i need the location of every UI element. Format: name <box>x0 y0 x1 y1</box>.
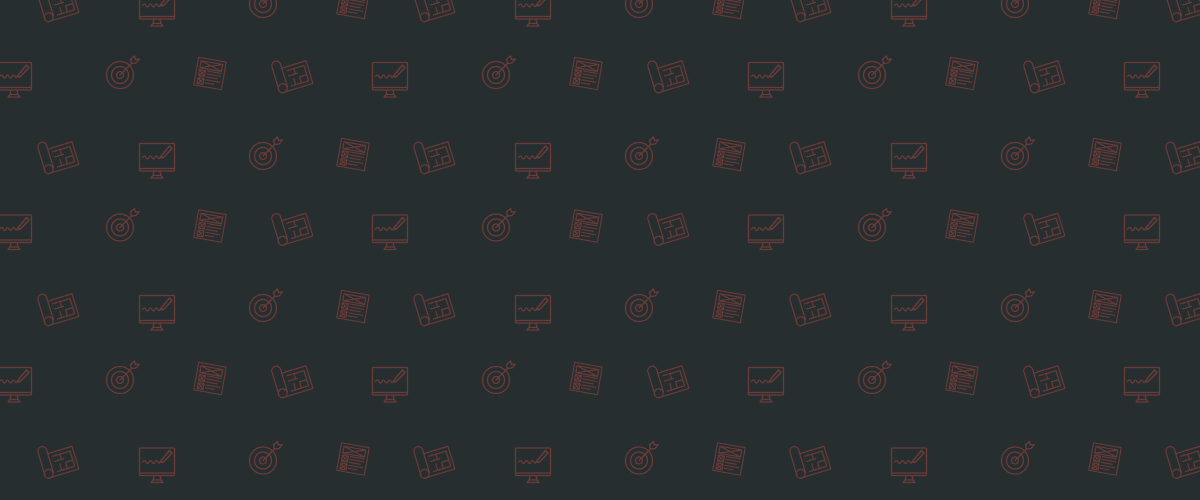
icon: document <box>194 210 226 242</box>
icon: monitor <box>516 144 550 178</box>
icon: monitor <box>1124 368 1160 402</box>
icon: target <box>1002 442 1034 474</box>
icon: monitor <box>0 215 32 250</box>
icon: document <box>337 0 369 19</box>
icon: blueprint <box>1022 53 1065 94</box>
icon: blueprint <box>788 0 831 23</box>
icon: monitor <box>372 62 408 97</box>
icon: target <box>1002 137 1034 170</box>
icon: blueprint <box>646 53 689 94</box>
icon: blueprint <box>36 438 79 479</box>
icon: target <box>250 137 282 170</box>
icon row 2 <box>0 53 1160 97</box>
icon: blueprint <box>412 0 455 23</box>
icon: document <box>570 57 602 90</box>
icon: target <box>106 361 140 394</box>
icon: monitor <box>748 368 784 402</box>
icon: document <box>946 362 978 395</box>
icon: monitor <box>140 0 174 26</box>
icon: document <box>570 362 602 395</box>
icon: blueprint <box>1164 286 1200 327</box>
icon: target <box>250 0 282 18</box>
icon: document <box>713 138 745 171</box>
icon: target <box>858 361 892 394</box>
icon: blueprint <box>412 286 455 327</box>
icon: blueprint <box>646 358 689 399</box>
icon row 5 <box>36 286 1200 330</box>
icon: blueprint <box>788 286 831 327</box>
icon: target <box>106 56 140 88</box>
icon: blueprint <box>646 205 689 246</box>
icon: document <box>337 443 369 475</box>
icon: document <box>194 362 226 395</box>
icon: target <box>250 442 282 474</box>
icon: monitor <box>892 448 926 482</box>
icon: monitor <box>372 215 408 250</box>
icon: document <box>713 0 745 19</box>
icon: target <box>858 56 892 88</box>
icon: document <box>570 210 602 242</box>
icon: monitor <box>516 0 550 26</box>
icon: target <box>106 208 140 241</box>
icon: target <box>1002 0 1034 18</box>
icon: document <box>1089 290 1121 323</box>
icon: document <box>1089 138 1121 171</box>
icon: document <box>713 443 745 475</box>
icon row 3 <box>36 134 1200 178</box>
icon: blueprint <box>788 134 831 175</box>
icon: document <box>194 57 226 90</box>
icon: target <box>626 442 658 474</box>
icon: document <box>946 57 978 90</box>
icon: target <box>626 289 658 322</box>
icon: target <box>626 0 658 18</box>
icon: document <box>337 138 369 171</box>
icon: target <box>482 361 516 394</box>
icon: document <box>946 210 978 242</box>
icon: target <box>250 289 282 322</box>
icon: blueprint <box>270 205 313 246</box>
icon: monitor <box>140 144 174 178</box>
icon row 6 <box>0 358 1160 402</box>
icon: monitor <box>748 215 784 250</box>
icon: blueprint <box>412 438 455 479</box>
icon: blueprint <box>412 134 455 175</box>
icon: document <box>1089 0 1121 19</box>
icon: monitor <box>892 0 926 26</box>
icon row 7 <box>36 438 1200 482</box>
icon: monitor <box>892 296 926 330</box>
icon: monitor <box>1124 215 1160 250</box>
icon: blueprint <box>1164 438 1200 479</box>
icon: blueprint <box>1022 205 1065 246</box>
icon: monitor <box>0 62 32 97</box>
icon row 1 <box>36 0 1200 26</box>
icon: monitor <box>516 296 550 330</box>
icon: blueprint <box>36 134 79 175</box>
icon: monitor <box>748 62 784 97</box>
icon: target <box>1002 289 1034 322</box>
icon: monitor <box>0 368 32 402</box>
icon: monitor <box>372 368 408 402</box>
icon: blueprint <box>1164 134 1200 175</box>
icon: monitor <box>516 448 550 482</box>
icon: document <box>713 290 745 323</box>
icon: blueprint <box>1164 0 1200 23</box>
icon: blueprint <box>36 0 79 23</box>
icon: blueprint <box>1022 358 1065 399</box>
icon: blueprint <box>270 53 313 94</box>
icon: blueprint <box>788 438 831 479</box>
icon: blueprint <box>36 286 79 327</box>
icon: blueprint <box>270 358 313 399</box>
icon: target <box>626 137 658 170</box>
icon: target <box>482 56 516 88</box>
icon: document <box>337 290 369 323</box>
icon: document <box>1089 443 1121 475</box>
icon: target <box>858 208 892 241</box>
icon: monitor <box>1124 62 1160 97</box>
icon row 4 <box>0 205 1160 250</box>
icon: target <box>482 208 516 241</box>
icon: monitor <box>892 144 926 178</box>
icon: monitor <box>140 448 174 482</box>
icon: monitor <box>140 296 174 330</box>
